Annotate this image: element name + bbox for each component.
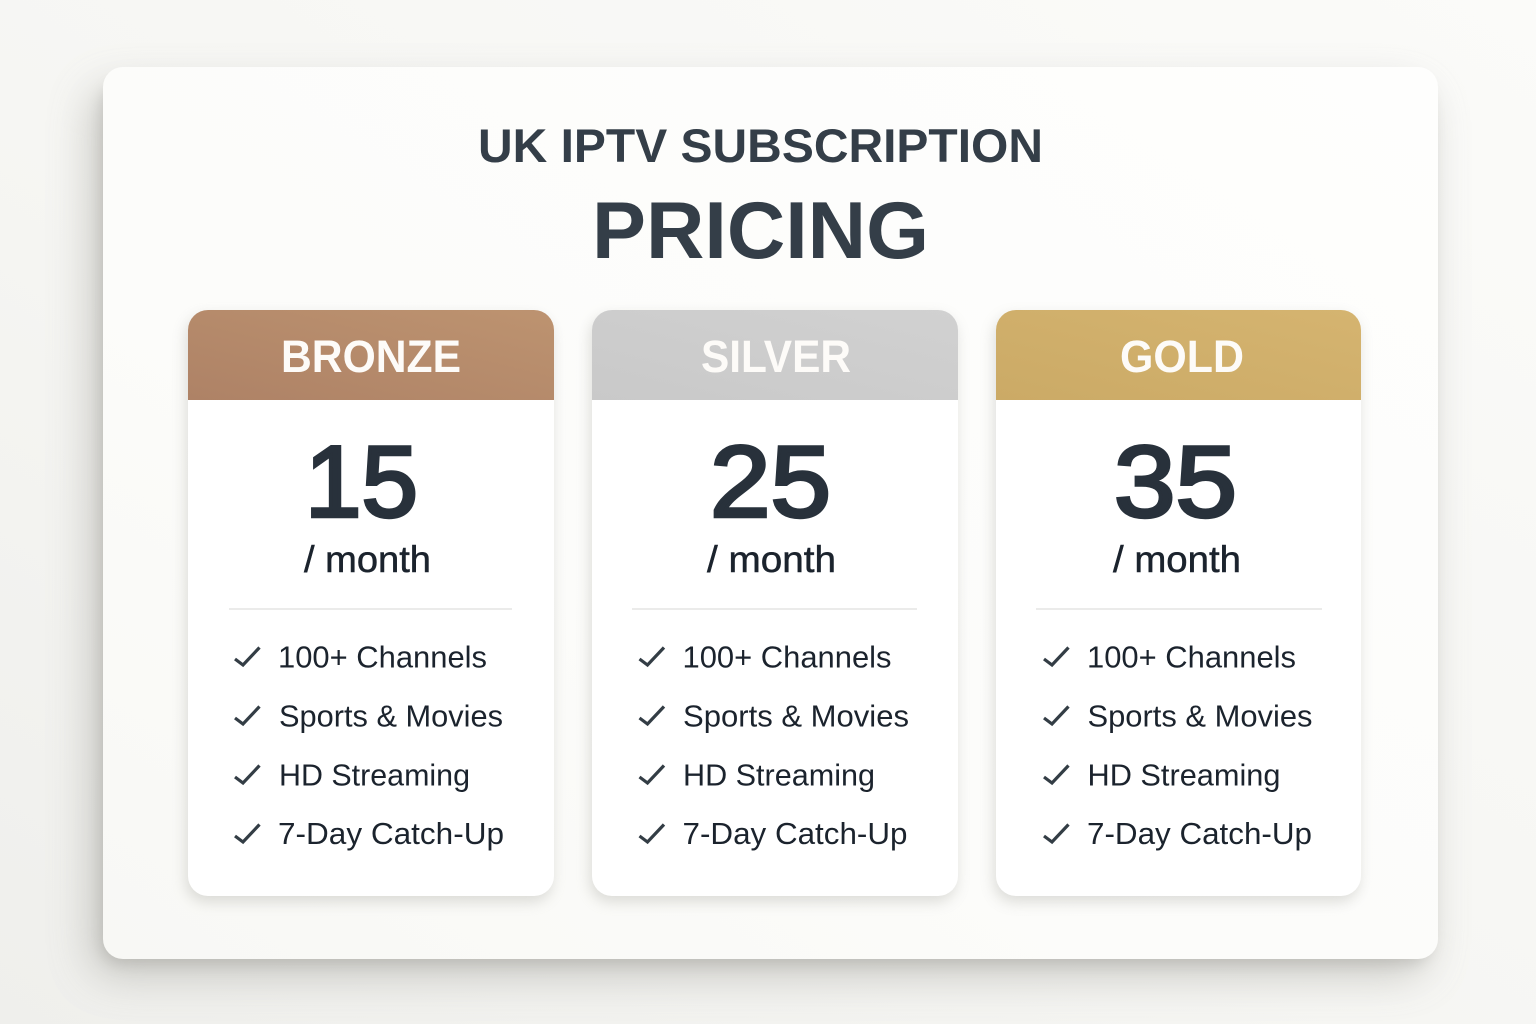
icon: check [1044,648,1068,665]
feature text: 7-Day Catch-Up [1087,817,1312,851]
tier name: bronze: BRONZE [281,331,461,382]
feature list [640,640,909,851]
card shadow [994,316,1359,902]
panel: silver plan [590,310,958,902]
panel background [103,67,1438,959]
card shadow [590,316,956,902]
price: 15: 15 [305,426,418,538]
card body [592,310,958,896]
feature text: 7-Day Catch-Up [682,817,908,851]
tier name: silver: SILVER [701,331,851,382]
feature text: Sports & Movies [1088,700,1312,734]
tier header: gold [996,310,1361,400]
icon: check [640,766,664,783]
feature text: 100+ Channels [682,640,892,674]
price period: / month [304,539,431,580]
panel shadow: wide [91,89,1426,975]
divider [632,608,917,610]
feature text: Sports & Movies [683,700,909,734]
card body [188,310,554,896]
icon: check [640,706,664,724]
icon: check [235,766,260,783]
feature text: HD Streaming [1088,758,1280,792]
panel shadow: tight [101,84,1431,964]
card shadow [186,316,552,902]
icon: check [1044,706,1068,724]
tier name: gold: GOLD [1120,331,1244,382]
feature text: Sports & Movies [279,700,503,734]
price: 25: 25 [710,426,831,538]
icon: check [1044,824,1068,842]
heading: Pricing: PRICING [592,186,929,276]
feature text: HD Streaming [683,758,875,792]
panel: gold plan [994,310,1361,902]
feature text: 100+ Channels [1087,640,1296,674]
price period: / month [1113,539,1241,580]
tier header: bronze [188,310,554,400]
heading: UK IPTV Subscription: UK IPTV SUBSCRIPTION [478,119,1043,172]
price period: / month [707,539,836,580]
price: 35: 35 [1114,426,1237,538]
icon: check [235,648,260,665]
divider [1036,608,1322,610]
feature text: HD Streaming [279,758,470,792]
panel: bronze plan [186,310,554,902]
feature text: 7-Day Catch-Up [278,817,504,851]
feature list [1044,640,1312,851]
divider [229,608,512,610]
icon: check [1044,766,1068,783]
icon: check [235,824,260,842]
icon: check [235,706,260,724]
tier header: silver [592,310,958,400]
feature list [235,640,504,851]
icon: check [640,648,664,665]
feature text: 100+ Channels [278,640,487,674]
main panel [103,67,1438,959]
card body [996,310,1361,896]
icon: check [640,824,664,842]
